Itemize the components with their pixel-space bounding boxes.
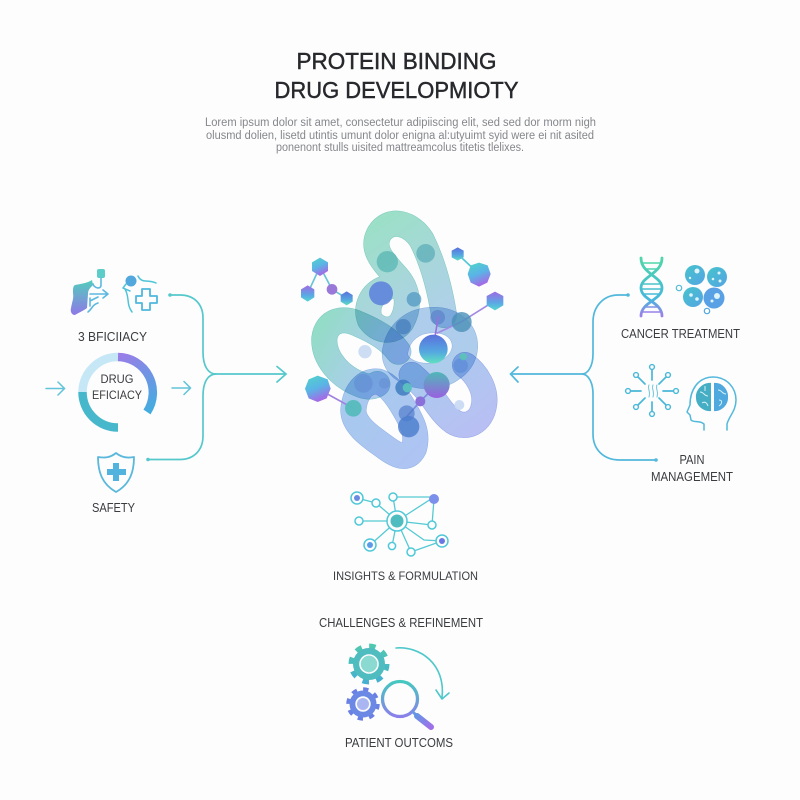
intro text block: olusmd dolien, lisetd utintis umunt dolor enigna al:utyuimt syid were ei nit asited xyxy=(206,130,594,142)
label: insights and formulation: INSIGHTS & FORMULATION xyxy=(333,569,478,583)
arrow: refinement curve xyxy=(396,648,449,699)
intro text block xyxy=(205,117,596,154)
icon: safety shield xyxy=(98,453,134,492)
icon: gears and magnifier xyxy=(348,646,449,727)
intro text block: Lorem ipsum dolor sit amet, consectetur adipiiscing elit, sed sed dor morm nigh xyxy=(205,117,596,129)
ribbon: left loop xyxy=(324,320,398,386)
donut chart: drug efficacy: DRUG xyxy=(100,372,134,386)
molecule: upper left cluster xyxy=(301,258,353,305)
donut chart: drug efficacy xyxy=(82,357,153,428)
label: challenges and refinement: CHALLENGES & REFINEMENT xyxy=(319,616,483,630)
molecule: lower left branch xyxy=(305,376,362,417)
icon: liver with drip xyxy=(71,269,108,315)
arrow: into donut xyxy=(46,382,64,395)
icon: DNA helix xyxy=(641,258,662,316)
icon: large gear xyxy=(351,646,387,682)
molecule: upper right cluster xyxy=(452,247,491,287)
label: pain management: MANAGEMENT xyxy=(651,470,733,484)
ribbon: right ring xyxy=(395,320,465,376)
ribbon: lower left loop xyxy=(353,382,415,456)
icon: magnifier xyxy=(382,682,431,727)
icon: cancer cells xyxy=(676,265,727,314)
icon: medical cross with molecule xyxy=(123,276,157,312)
donut chart: drug efficacy: EFICIACY xyxy=(92,388,142,402)
molecule: lower sphere cluster xyxy=(407,372,450,417)
connector: right to protein xyxy=(510,293,658,462)
label: patient outcomes: PATIENT OUTCOMS xyxy=(345,736,453,750)
intro text block: ponenont stulls uisited mattreamcolus titetis tlelixes. xyxy=(276,142,524,154)
label: pain management: PAIN xyxy=(680,453,704,467)
icon: head with brain xyxy=(687,377,736,430)
label: efficacy: 3 BFICIIACY xyxy=(78,330,148,344)
label: cancer treatment: CANCER TREATMENT xyxy=(621,327,740,341)
icon: pain nerve burst xyxy=(626,365,678,416)
connector: left to protein xyxy=(146,293,286,461)
title xyxy=(274,48,518,103)
title: PROTEIN BINDING xyxy=(296,48,496,74)
title: DRUG DEVELOPMIOTY xyxy=(274,77,518,103)
icon: small gear xyxy=(348,690,378,718)
molecule: right branch xyxy=(430,292,503,333)
icon: network xyxy=(351,492,448,556)
molecule: inner nodes xyxy=(354,244,468,437)
label: pain management xyxy=(651,453,733,484)
label: safety: SAFETY xyxy=(92,501,136,515)
molecule: central sphere xyxy=(419,317,448,363)
arrow: out of donut xyxy=(172,382,190,394)
ribbon: top loop xyxy=(368,224,444,330)
ribbon: lower right loop xyxy=(412,365,484,425)
protein structure xyxy=(301,224,503,456)
